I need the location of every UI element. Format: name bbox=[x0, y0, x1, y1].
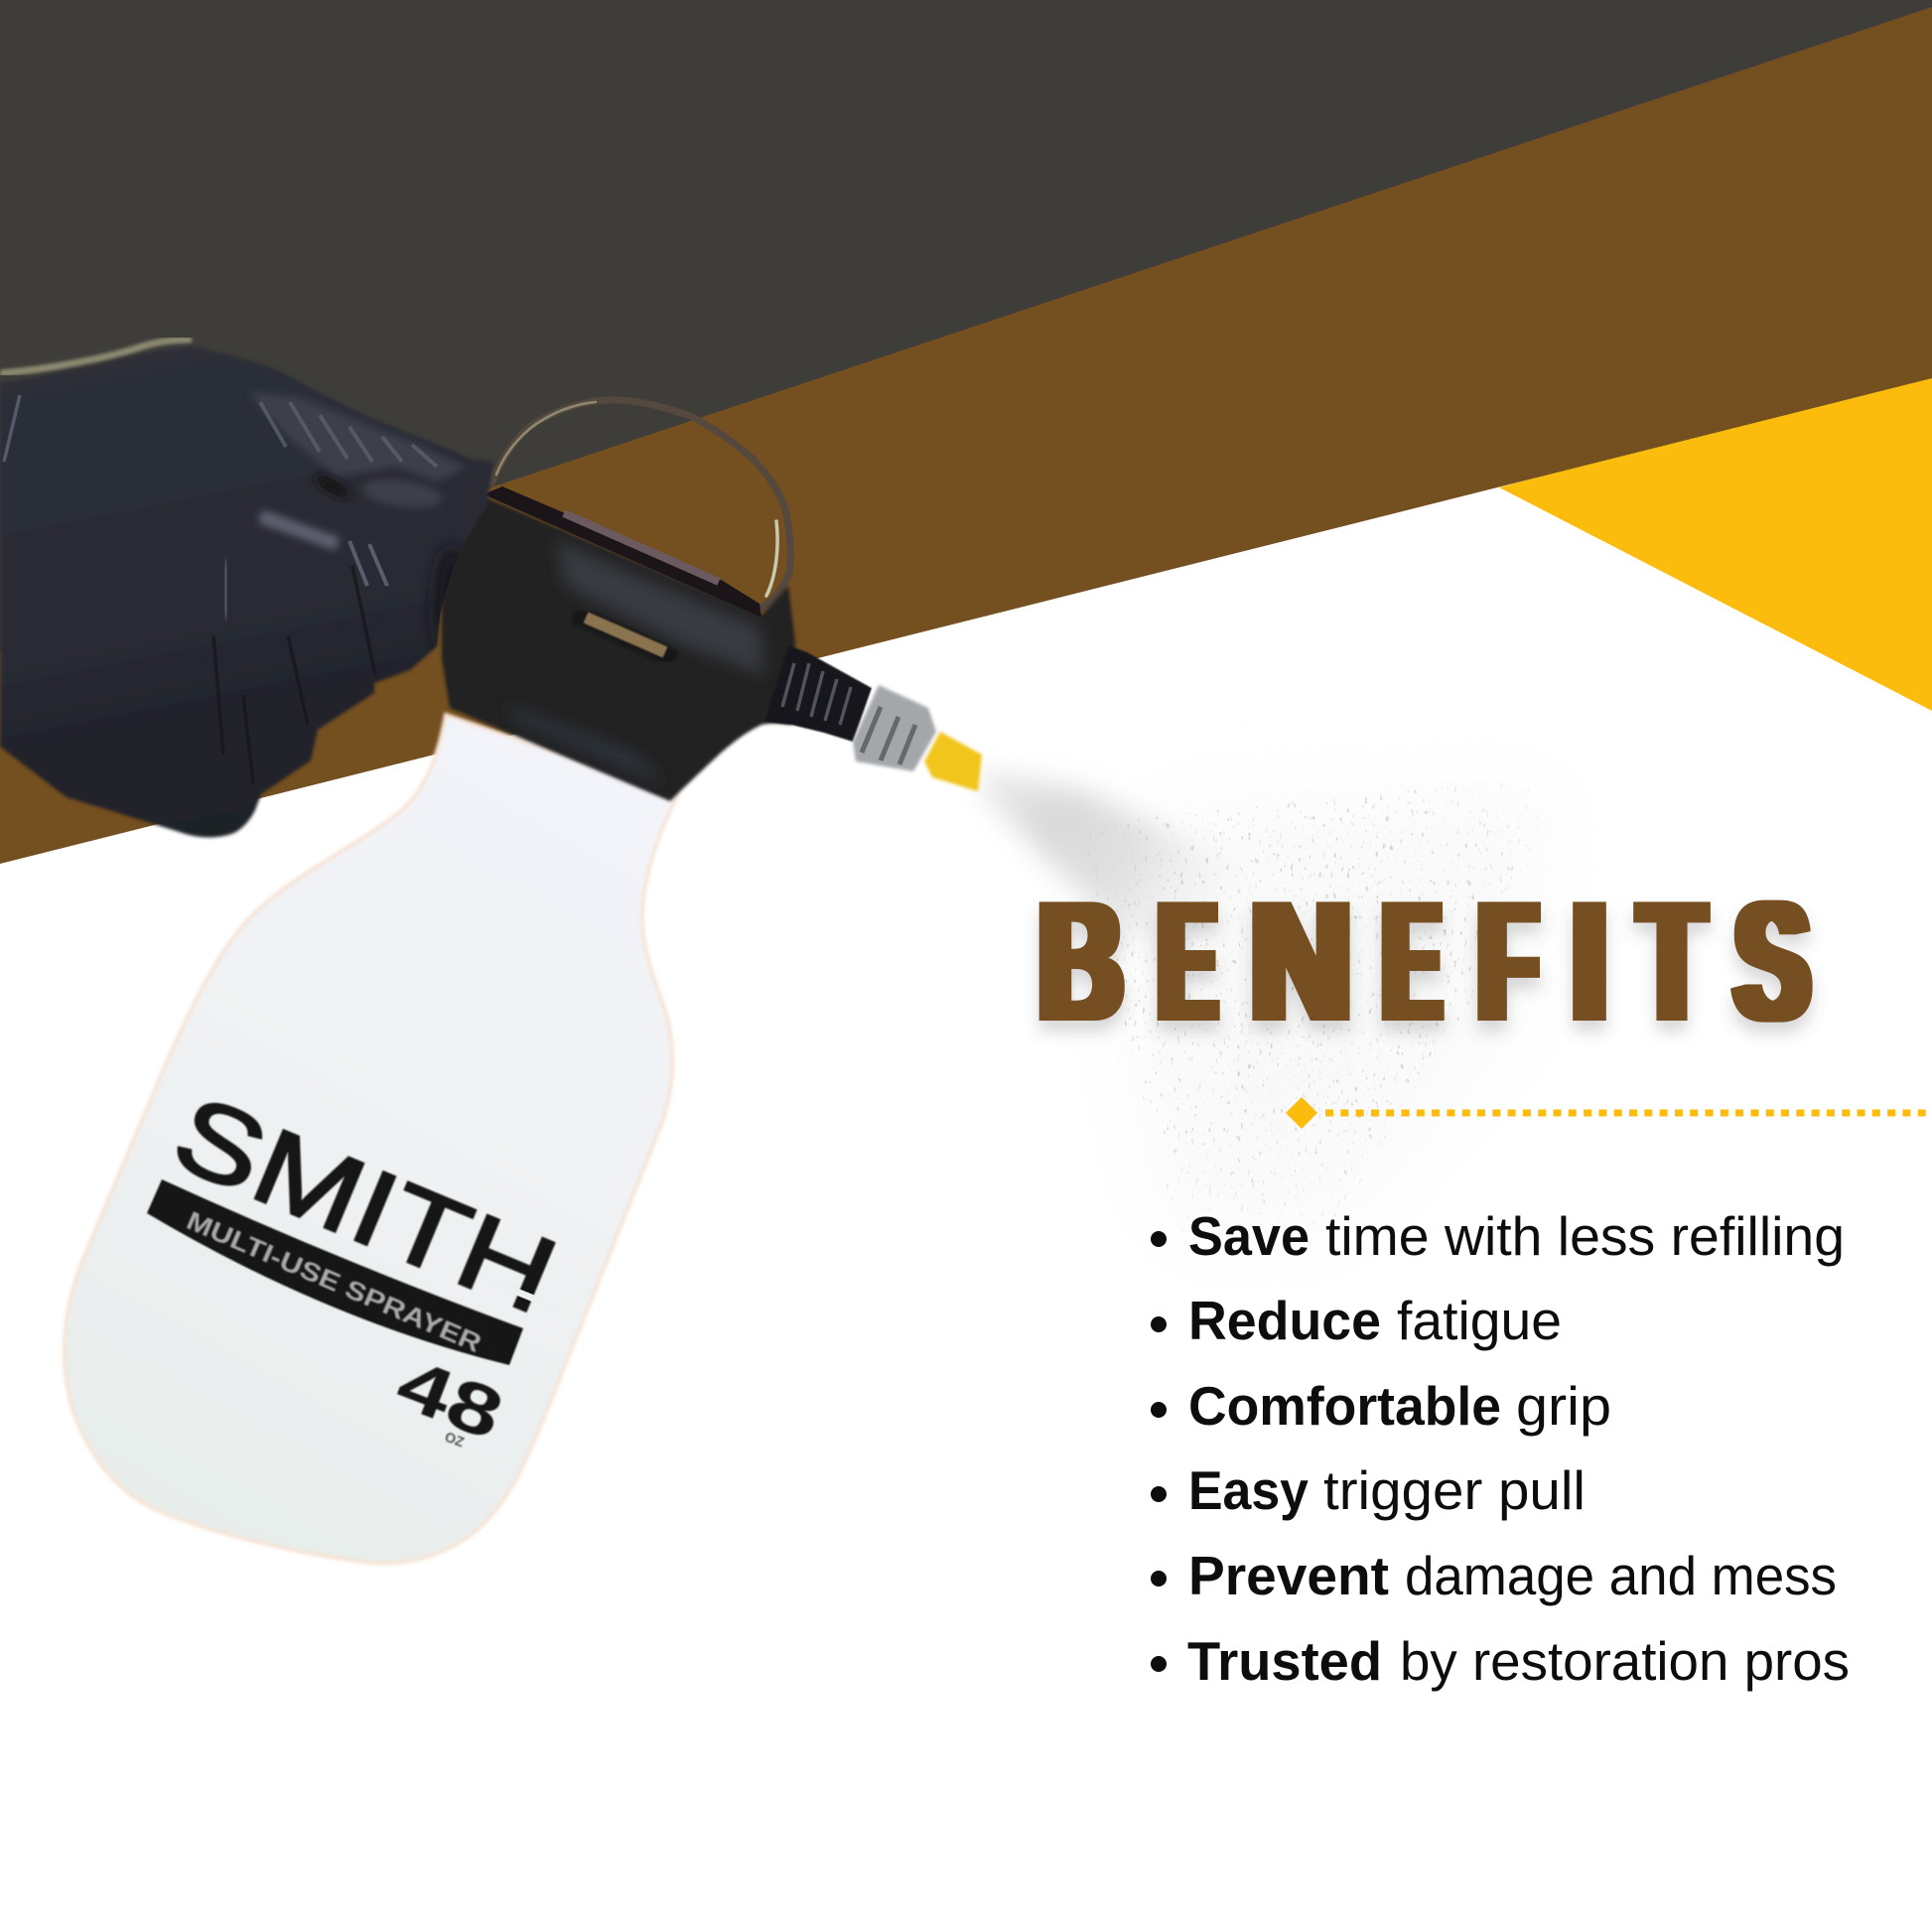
item: prevent damage: damage and mess bbox=[1405, 1545, 1837, 1606]
sprayer head bbox=[442, 400, 982, 801]
head top highlight bbox=[556, 541, 764, 675]
spray mist bbox=[981, 768, 1548, 1251]
heading: BENEFITS: E bbox=[1160, 867, 1215, 1056]
heading: BENEFITS: E bbox=[1384, 867, 1440, 1056]
item: trusted by pros: by restoration pros bbox=[1400, 1630, 1850, 1692]
item: comfortable grip: grip bbox=[1516, 1375, 1611, 1437]
item: trusted by pros: Trusted bbox=[1187, 1630, 1382, 1692]
background: dark charcoal band bbox=[0, 0, 1932, 651]
item: reduce fatigue: fatigue bbox=[1397, 1290, 1562, 1351]
bottle logo: 48 oz: 48 bbox=[386, 1343, 513, 1455]
diamond marker bbox=[1286, 1097, 1317, 1129]
background: brown diagonal band bbox=[0, 7, 1932, 864]
threaded tube bbox=[764, 645, 872, 742]
wrist highlight streak bbox=[0, 340, 192, 373]
heading: BENEFITS: B bbox=[1039, 867, 1122, 1056]
sprayer bottle bbox=[65, 715, 678, 1564]
background: yellow triangle bbox=[1499, 372, 1932, 711]
head lower bluish sheen bbox=[506, 705, 665, 784]
glove wrinkles bbox=[4, 395, 437, 784]
bottle logo: SMITH: SMITH bbox=[158, 1072, 573, 1336]
gloved hand bbox=[0, 340, 493, 837]
heading: BENEFITS: T bbox=[1640, 867, 1704, 1056]
heading: BENEFITS bbox=[1039, 867, 1809, 1056]
item: easy trigger pull: trigger pull bbox=[1323, 1459, 1586, 1521]
item: reduce fatigue: Reduce bbox=[1188, 1290, 1381, 1351]
trigger bbox=[574, 614, 675, 659]
item: trusted by pros bbox=[1151, 1630, 1850, 1692]
glove shading and highlights bbox=[225, 392, 470, 665]
heading: BENEFITS: S bbox=[1735, 867, 1809, 1056]
item: comfortable grip bbox=[1151, 1375, 1611, 1437]
item: easy trigger pull: Easy bbox=[1188, 1459, 1309, 1521]
item: save time: time with less refilling bbox=[1325, 1205, 1845, 1267]
bottle body bbox=[65, 715, 678, 1564]
divider: diamond and dotted line bbox=[1286, 1097, 1932, 1129]
item: reduce fatigue bbox=[1151, 1290, 1562, 1351]
bottle logo: multi-use sprayer: MULTI-USE SPRAYER bbox=[183, 1205, 486, 1358]
item: prevent damage bbox=[1151, 1545, 1837, 1606]
benefits list bbox=[1151, 1205, 1850, 1692]
head body bbox=[442, 493, 795, 801]
item: save time: Save bbox=[1188, 1205, 1310, 1267]
heading: BENEFITS: I bbox=[1573, 867, 1606, 1056]
grey collar nut bbox=[853, 685, 936, 771]
item: comfortable grip: Comfortable bbox=[1188, 1375, 1501, 1437]
item: easy trigger pull bbox=[1151, 1459, 1586, 1521]
handle slot bbox=[483, 486, 761, 618]
bottle logo: black label bar bbox=[147, 1179, 523, 1365]
yellow nozzle tip bbox=[924, 732, 982, 791]
heading: BENEFITS: N bbox=[1251, 867, 1351, 1056]
bottle logo: 48 oz: OZ bbox=[443, 1429, 467, 1450]
heading: BENEFITS: F bbox=[1479, 867, 1537, 1056]
item: prevent damage: Prevent bbox=[1188, 1545, 1389, 1606]
carry handle loop bbox=[491, 400, 790, 608]
bottle logo: letter gap bbox=[481, 1277, 558, 1309]
glove shape bbox=[0, 346, 493, 837]
